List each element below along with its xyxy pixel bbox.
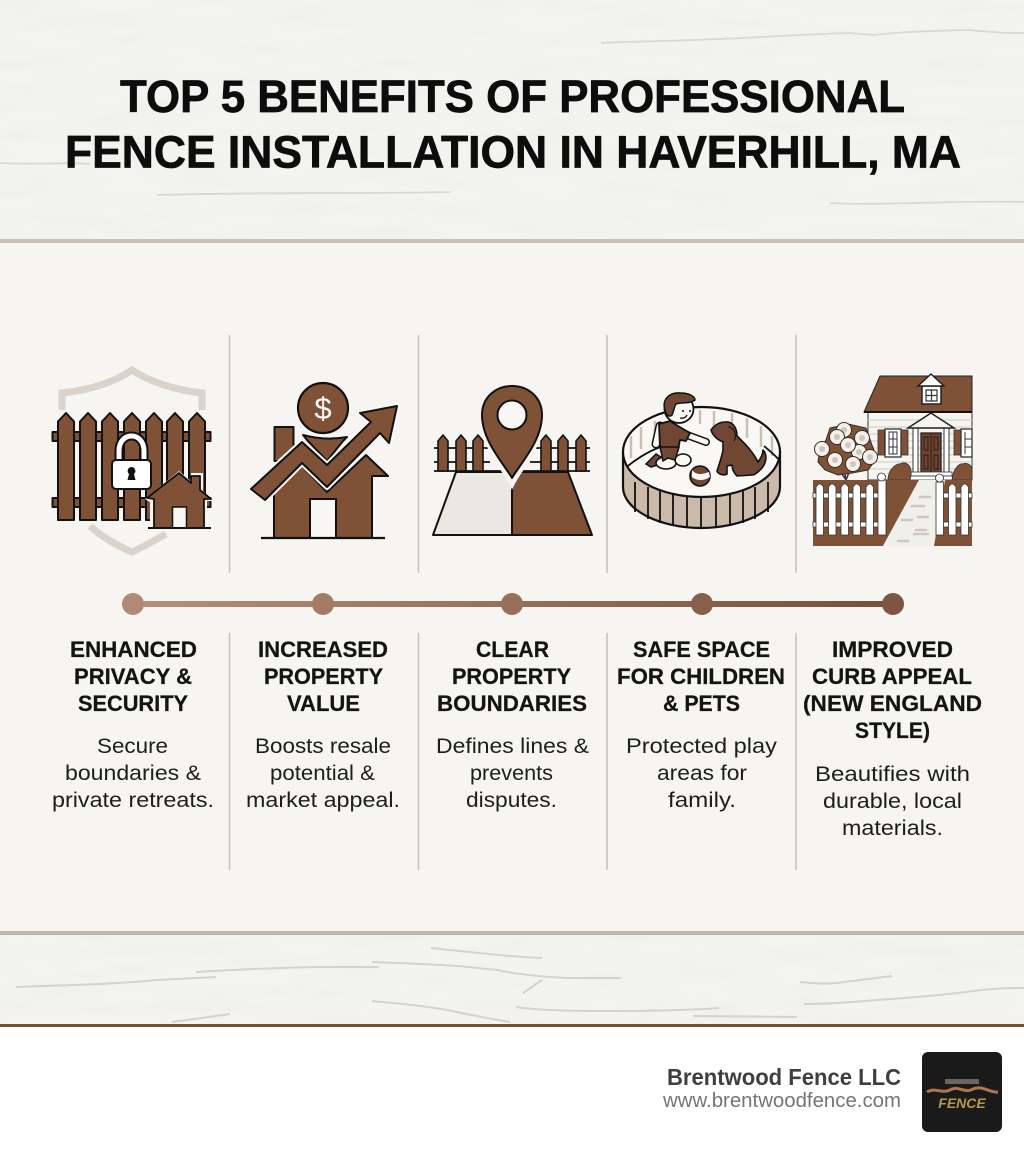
- company logo: [922, 1052, 1002, 1132]
- benefit 1 text: ENHANCED: [70, 637, 197, 662]
- benefit 1 text: private retreats.: [52, 789, 214, 812]
- benefit 3 text: disputes.: [466, 789, 557, 812]
- icon: fence with padlock, house and shield: [52, 370, 214, 552]
- benefit 2 text: Boosts resale: [255, 735, 391, 758]
- benefit 4 text: & PETS: [663, 691, 740, 716]
- icon: New England house with picket fence and hydrangea: [813, 374, 972, 546]
- company logo: FENCE: [938, 1095, 986, 1111]
- benefit 5 text: [803, 637, 982, 840]
- benefit 1 text: SECURITY: [78, 691, 188, 716]
- benefit 1 text: PRIVACY &: [74, 664, 192, 689]
- benefit 3 text: [436, 637, 589, 812]
- benefit 5 text: CURB APPEAL: [812, 664, 972, 689]
- footer rule: [0, 1024, 1024, 1027]
- top wood header band: [0, 0, 1024, 240]
- benefit 4 text: FOR CHILDREN: [617, 664, 785, 689]
- icon: child and dog playing in round pen: [623, 393, 780, 528]
- main panel background: [0, 243, 1024, 931]
- title: FENCE INSTALLATION IN HAVERHILL, MA: [65, 126, 961, 178]
- benefit 4 text: areas for: [657, 762, 747, 785]
- benefit 3 text: CLEAR: [476, 637, 549, 662]
- benefit 2 text: VALUE: [287, 691, 360, 716]
- footer brand text: [662, 1064, 901, 1112]
- benefit 5 text: IMPROVED: [832, 637, 953, 662]
- icon: map pin over property boundary: [433, 386, 592, 535]
- benefit 4 text: [617, 637, 785, 812]
- title: TOP 5 BENEFITS OF PROFESSIONAL: [120, 71, 905, 122]
- benefit 2 text: [246, 637, 400, 812]
- benefit 5 text: durable, local: [823, 790, 962, 813]
- benefit 1 text: Secure: [97, 735, 168, 758]
- benefit 3 text: PROPERTY: [452, 664, 571, 689]
- benefit 4 text: family.: [668, 789, 736, 812]
- benefit 3 text: prevents: [470, 762, 553, 785]
- benefit 5 text: materials.: [842, 817, 943, 840]
- benefit 1 text: [52, 637, 214, 812]
- benefit 4 text: Protected play: [626, 735, 778, 758]
- footer brand text: www.brentwoodfence.com: [662, 1090, 901, 1112]
- icon: house value with dollar coin and rising arrow: $: [314, 391, 332, 426]
- benefit 2 text: INCREASED: [258, 637, 388, 662]
- timeline with five nodes: [122, 593, 904, 615]
- benefit 3 text: Defines lines &: [436, 735, 589, 758]
- benefit 2 text: market appeal.: [246, 789, 400, 812]
- bottom wood band: [0, 931, 1024, 1024]
- benefit 5 text: STYLE): [855, 718, 930, 743]
- header divider: [0, 239, 1024, 243]
- benefit 5 text: Beautifies with: [815, 763, 970, 786]
- benefit 2 text: PROPERTY: [264, 664, 383, 689]
- title: [65, 71, 961, 178]
- benefit 5 text: (NEW ENGLAND: [803, 691, 982, 716]
- benefit 1 text: boundaries &: [65, 762, 201, 785]
- icon: house value with dollar coin and rising arrow: [251, 383, 397, 538]
- benefit 2 text: potential &: [270, 762, 375, 785]
- column dividers: [230, 335, 796, 870]
- benefit 4 text: SAFE SPACE: [633, 637, 770, 662]
- footer brand text: Brentwood Fence LLC: [667, 1064, 901, 1090]
- benefit 3 text: BOUNDARIES: [437, 691, 587, 716]
